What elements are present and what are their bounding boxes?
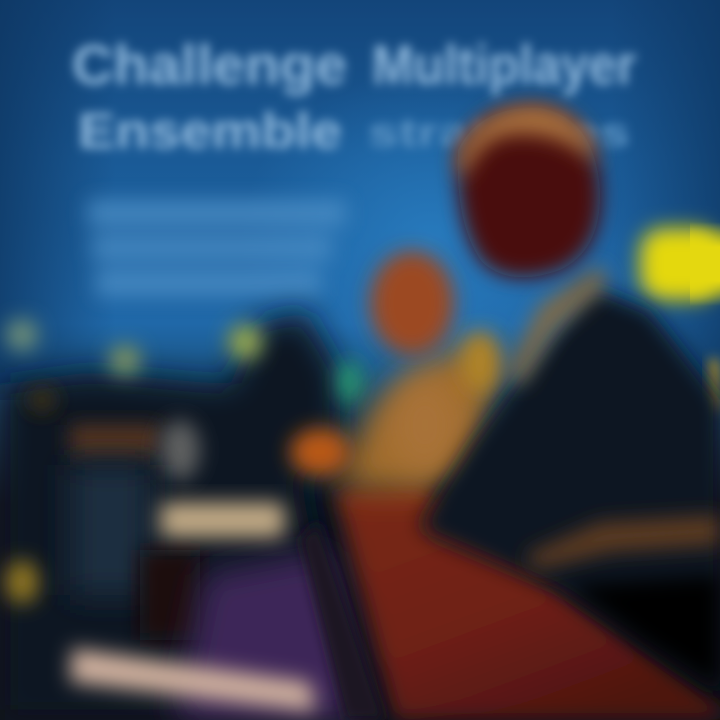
middle figure: [290, 251, 500, 490]
light paper on desk: [160, 502, 285, 538]
light paper in foreground: [70, 648, 316, 712]
yellow light on right: [640, 222, 720, 412]
background lights: [5, 319, 362, 604]
dark lower room: [0, 310, 350, 720]
subtitle text block: [88, 200, 346, 296]
title: Ensemble: [78, 103, 342, 159]
foreground figure: [420, 105, 720, 695]
title: Challenge: [72, 33, 347, 96]
red wooden table: [300, 482, 720, 720]
title: Multiplayer: [372, 33, 636, 96]
hair: [456, 105, 598, 180]
title: [72, 33, 636, 159]
title: strategies: [368, 111, 630, 155]
head: [458, 108, 600, 277]
purple floor: [175, 550, 365, 720]
seated figures and desk in the left background: [70, 420, 200, 640]
